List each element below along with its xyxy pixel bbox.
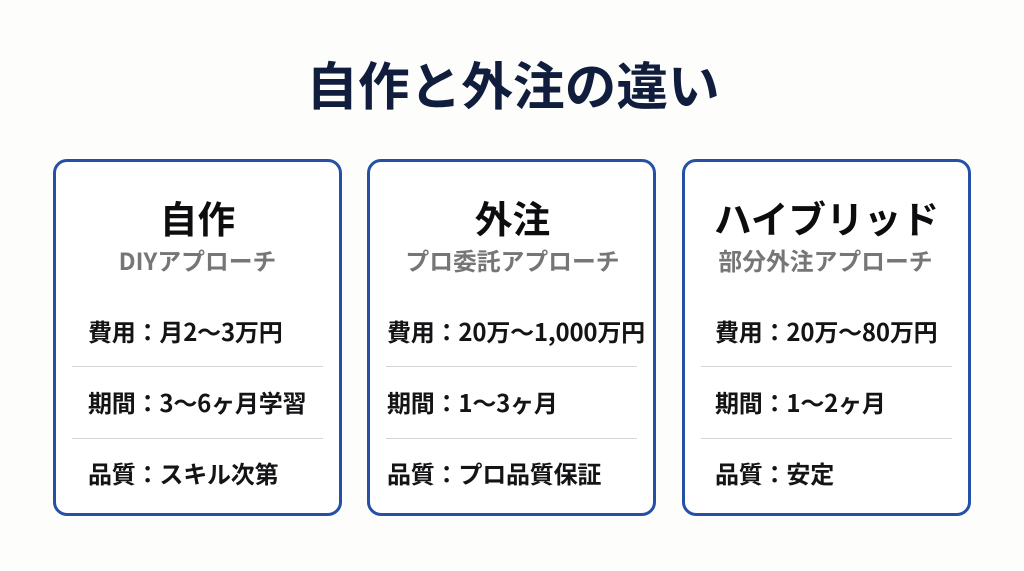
row: 品質 自作: 品質：スキル次第 xyxy=(88,455,278,490)
row: 期間 ハイブリッド: 期間：1〜2ヶ月 xyxy=(715,384,886,419)
panel: 外注 xyxy=(367,159,656,516)
heading: 外注: 外注 xyxy=(475,189,550,244)
row: 期間 外注: 期間：1〜3ヶ月 xyxy=(387,384,558,419)
subheading: DIY: DIYアプローチ xyxy=(119,242,276,277)
row: 費用 ハイブリッド: 費用：20万〜80万円 xyxy=(715,313,937,348)
subheading: 部分外注: 部分外注アプローチ xyxy=(718,242,933,277)
row: 品質 外注: 品質：プロ品質保証 xyxy=(387,455,601,490)
panel: ハイブリッド xyxy=(682,159,971,516)
heading: 自作: 自作 xyxy=(160,189,235,244)
subheading: プロ委託: プロ委託アプローチ xyxy=(405,242,620,277)
row: 期間 自作: 期間：3〜6ヶ月学習 xyxy=(88,384,306,419)
row: 品質 ハイブリッド: 品質：安定 xyxy=(715,455,834,490)
panel: 自作 xyxy=(53,159,342,516)
row: 費用 外注: 費用：20万〜1,000万円 xyxy=(387,313,645,348)
row: 費用 自作: 費用：月2〜3万円 xyxy=(88,313,283,348)
heading: ハイブリッド: ハイブリッド xyxy=(714,189,939,244)
title: 自作と外注の違い xyxy=(306,45,720,120)
